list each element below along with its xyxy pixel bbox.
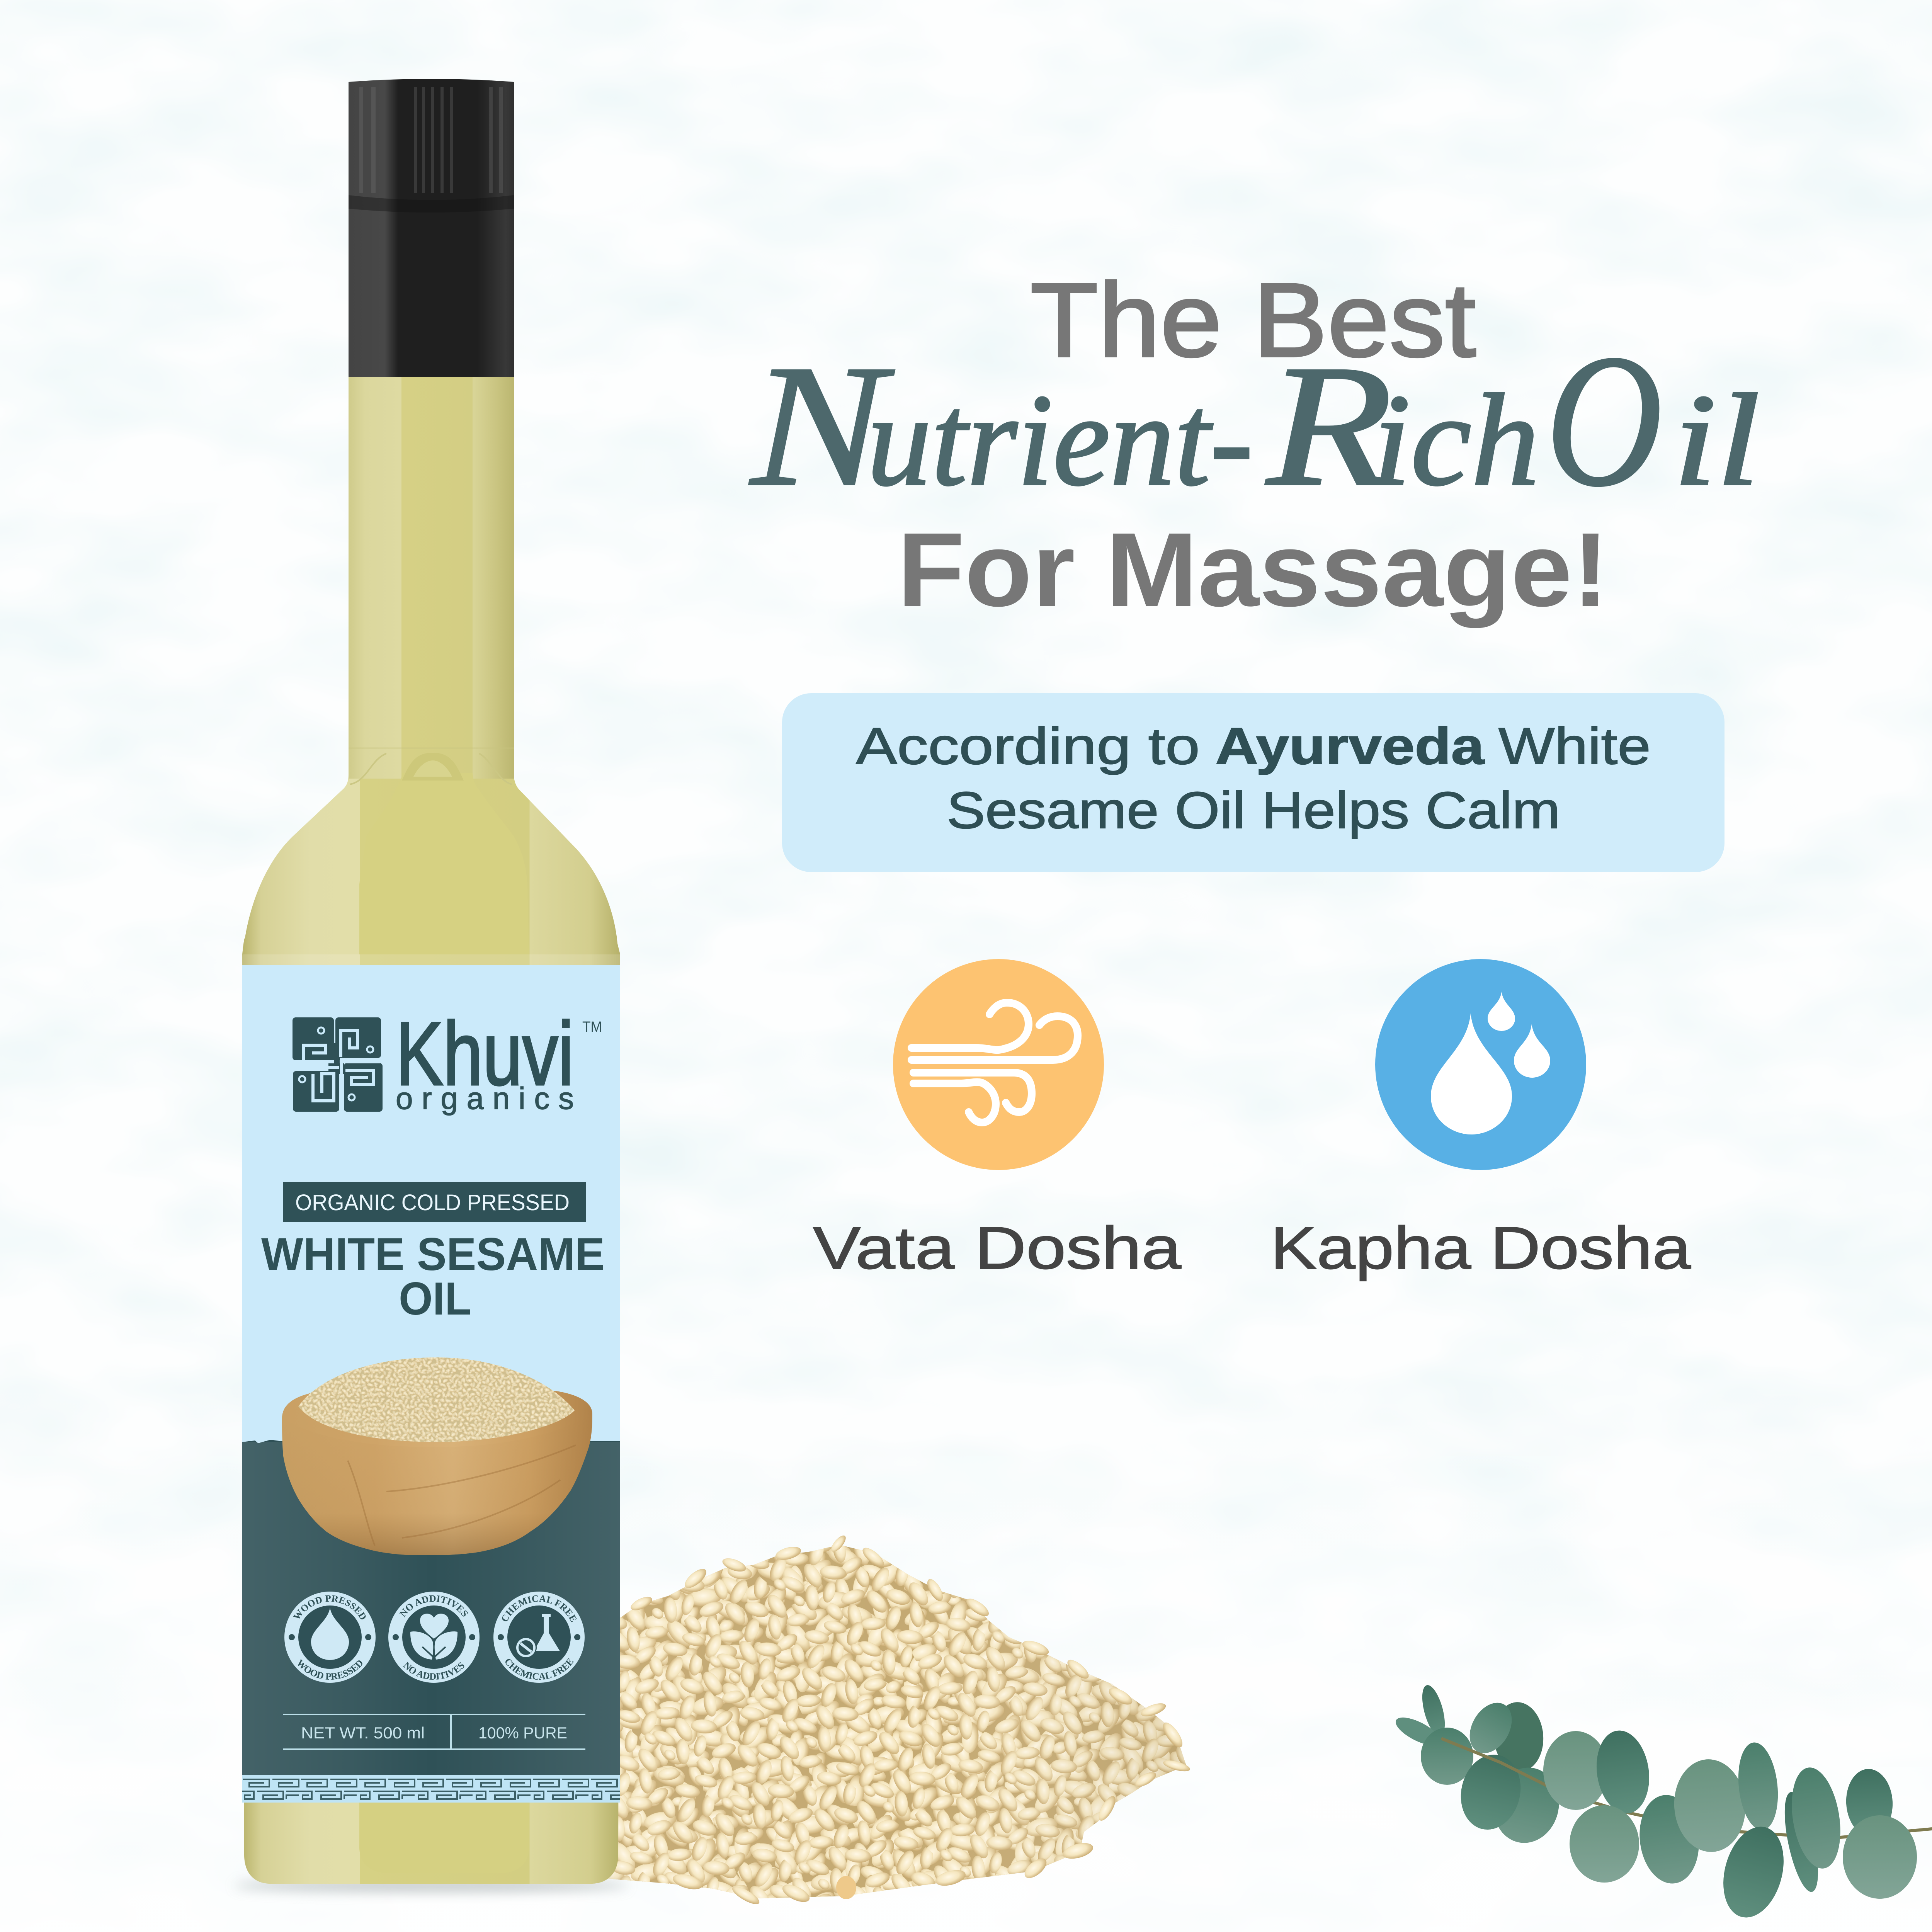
- bottle shadow: [234, 1879, 628, 1892]
- badge: wood pressed: [284, 1592, 376, 1683]
- cap groove: [349, 195, 514, 213]
- label divider lines: [283, 1714, 585, 1749]
- brand name: organics: [396, 1081, 574, 1116]
- sesame seed pile: [580, 1533, 1191, 1907]
- callout text: Sesame Oil Helps Calm: [947, 782, 1560, 839]
- badge: chemical free: CHEMICAL FREE: [499, 1594, 579, 1624]
- badge: chemical free: CHEMICAL FREE: [502, 1656, 576, 1682]
- purity text: 100% PURE: [478, 1724, 567, 1742]
- headline script line: utrient-: [867, 367, 1253, 513]
- eucalyptus leaves behind stem: [1392, 1683, 1566, 1849]
- headline script line: ich: [1373, 367, 1539, 513]
- callout text: Ayurveda: [1215, 718, 1485, 775]
- eucalyptus stem: [1441, 1738, 1932, 1837]
- brand name: Khuvi: [396, 1004, 574, 1104]
- badge: wood pressed: WOOD PRESSED: [294, 1658, 366, 1682]
- product name: [261, 1228, 605, 1325]
- badge: no additives: NO ADDITIVES: [401, 1660, 467, 1682]
- bottle: [242, 79, 620, 1884]
- headline script line: N: [748, 330, 895, 522]
- headline script line: il: [1673, 367, 1760, 513]
- callout text: According to: [856, 718, 1200, 775]
- callout pill: [782, 693, 1725, 872]
- eucalyptus branch: [1392, 1683, 1932, 1924]
- product name: WHITE SESAME: [261, 1228, 605, 1280]
- label: kapha dosha: Kapha Dosha: [1270, 1214, 1691, 1281]
- eucalyptus leaves over stem: [1543, 1727, 1917, 1924]
- cap: [349, 79, 514, 377]
- bottle neck: [349, 377, 514, 779]
- wooden bowl of sesame: [282, 1357, 592, 1555]
- headline script line: R: [1264, 330, 1393, 522]
- bottle glass body: [242, 775, 620, 1884]
- logo mark: [293, 1017, 383, 1112]
- label banner: organic cold pressed: ORGANIC COLD PRESSED: [295, 1190, 570, 1215]
- badge: chemical free: [493, 1592, 585, 1683]
- label: meander band: [242, 1775, 620, 1803]
- label: light panel: [242, 965, 620, 1803]
- headline line 3: For Massage!: [897, 511, 1609, 629]
- loose seeds along the pile edge: [629, 1533, 1191, 1907]
- headline line 1: The Best: [1030, 261, 1476, 379]
- label: dark lower panel: [242, 1440, 620, 1775]
- cap ridges: [359, 87, 503, 193]
- brand name: TM: [582, 1019, 602, 1035]
- icon: vata wind: [893, 959, 1104, 1170]
- callout text: White: [1498, 718, 1651, 775]
- shoulder highlight: [359, 773, 529, 954]
- label banner: organic cold pressed: [283, 1182, 586, 1222]
- badge: no additives: [388, 1592, 480, 1683]
- net weight text: NET WT. 500 ml: [301, 1724, 425, 1742]
- neck collar ring: [349, 748, 514, 784]
- label: vata dosha: Vata Dosha: [813, 1214, 1182, 1281]
- bottom inner base: [359, 1803, 529, 1873]
- badge: wood pressed: WOOD PRESSED: [291, 1594, 369, 1622]
- headline script line: O: [1546, 315, 1662, 525]
- badge: no additives: NO ADDITIVES: [398, 1594, 470, 1619]
- callout text: [856, 718, 1651, 839]
- headline: [748, 261, 1760, 629]
- label: glass strip above label: [242, 954, 620, 965]
- product name: OIL: [399, 1273, 471, 1325]
- icon: kapha water drops: [1375, 959, 1586, 1170]
